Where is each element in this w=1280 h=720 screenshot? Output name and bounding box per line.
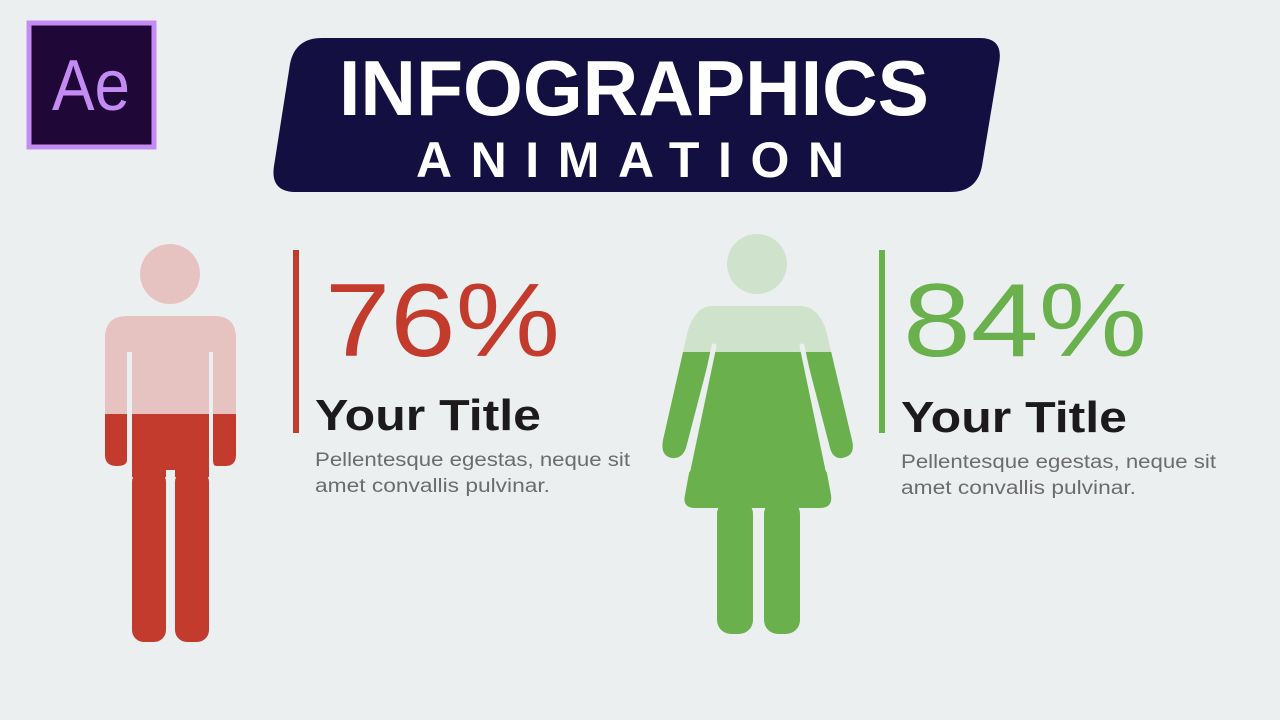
stat: 84%: 84% xyxy=(903,263,1147,379)
icon: man figure 76% xyxy=(105,244,236,642)
icon: Ae logo: Ae xyxy=(52,46,130,126)
icon: Ae logo xyxy=(29,23,154,147)
title banner: ANIMATION xyxy=(416,132,856,188)
description right: amet convallis pulvinar. xyxy=(901,478,1136,499)
description left: amet convallis pulvinar. xyxy=(315,476,550,497)
title banner xyxy=(273,38,1000,192)
stat: 76%: 76% xyxy=(325,263,560,379)
description left: Pellentesque egestas, neque sit xyxy=(315,450,631,471)
title banner: INFOGRAPHICS xyxy=(339,44,929,132)
divider bar right xyxy=(879,250,885,433)
icon: woman figure 84% xyxy=(662,234,853,634)
divider bar left xyxy=(293,250,299,433)
description right: Pellentesque egestas, neque sit xyxy=(901,452,1217,473)
heading left: Your Title xyxy=(315,391,541,440)
heading right: Your Title xyxy=(901,393,1127,442)
